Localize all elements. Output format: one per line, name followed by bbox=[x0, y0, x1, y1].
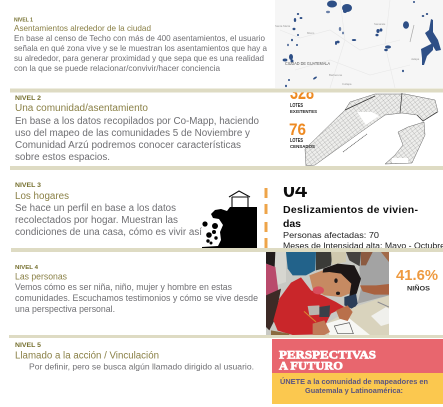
heading: perspectivas a futuro bbox=[279, 348, 376, 372]
map: settlements around the city bbox=[275, 0, 443, 88]
heading: perspectivas a futuro: PERSPECTIVAS bbox=[279, 348, 376, 362]
text block: level 4: una perspectiva personal. bbox=[15, 304, 115, 315]
stat: lots surveyed bbox=[289, 120, 315, 149]
stat: lots surveyed: CENSADOS bbox=[290, 144, 315, 149]
map: settlements around the city: Mixco bbox=[307, 31, 315, 35]
text block: level 3: recolectados por hogar. Muestran las bbox=[15, 215, 178, 226]
text block: level 5: NIVEL 5 bbox=[15, 343, 42, 349]
text block: level 2: En base a los datos recopilados por Co-Mapp, haciendo bbox=[15, 116, 259, 127]
divider: level 3-4 bbox=[11, 248, 443, 252]
text block: level 2 bbox=[15, 96, 259, 163]
card: landslide statistics bbox=[283, 187, 443, 248]
text block: level 2: uso del mapeo de las comunidades 5 de Noviembre y bbox=[15, 128, 250, 139]
dashed orange line bbox=[264, 188, 268, 248]
card: landslide statistics: 04 bbox=[283, 179, 307, 202]
text block: level 4 bbox=[15, 265, 258, 315]
text block: level 4: Las personas bbox=[15, 272, 67, 282]
map: settlements around the city: Jalapa bbox=[411, 57, 420, 61]
panel: perspectivas a futuro bbox=[272, 339, 443, 404]
map: settlements around the city: Barberena bbox=[329, 73, 343, 77]
stat: lots existing bbox=[290, 92, 317, 113]
text block: level 3: Se hace un perfil en base a los datos bbox=[15, 203, 176, 214]
text block: level 4: Vemos cómo es ser niña, niño, mujer y hombre en estas bbox=[15, 282, 232, 293]
stat: 41.6% children: 41.6% bbox=[396, 267, 438, 284]
stat: 41.6% children bbox=[396, 267, 438, 292]
text block: level 1: señala en qué zona vive y se le muestran los asentamientos que hay a bbox=[14, 43, 267, 53]
heading: perspectivas a futuro: A FUTURO bbox=[279, 358, 343, 372]
text block: level 1: su alrededor, para generar proximidad y que sepa que es una realidad bbox=[14, 53, 264, 63]
text block: level 2: sobre estos espacios. bbox=[15, 152, 110, 163]
stat: lots surveyed: LOTES bbox=[290, 138, 304, 144]
text block: level 4: NIVEL 4 bbox=[15, 265, 39, 271]
text block: level 2: Una comunidad/asentamiento bbox=[15, 103, 148, 114]
stat: lots existing: LOTES bbox=[290, 103, 304, 109]
text block: level 5: Llamado a la acción / Vinculación bbox=[15, 350, 159, 362]
stat: 41.6% children: NIÑOS bbox=[407, 286, 430, 292]
call to action text bbox=[280, 377, 428, 395]
call to action text: ÚNETE a la comunidad de mapeadores en bbox=[280, 377, 428, 386]
text block: level 4: comunidades. Escuchamos testimonios y cómo se vive desde bbox=[15, 293, 258, 304]
map: settlements around the city: Cuilapa bbox=[342, 82, 352, 86]
text block: level 5: Por definir, pero se busca algún llamado dirigido al usuario. bbox=[29, 362, 254, 372]
map: community lots bbox=[305, 93, 438, 166]
divider: level 4-5 bbox=[9, 335, 443, 338]
stat: lots existing: 328 bbox=[290, 83, 314, 104]
text block: level 1: En base al censo de Techo con más de 400 asentamientos, el usuario bbox=[14, 33, 265, 43]
divider: level 2-3 bbox=[10, 166, 443, 170]
photo: child drawing bbox=[266, 252, 389, 335]
call to action text: Guatemala y Latinoamérica: bbox=[305, 388, 403, 395]
text block: level 1: Asentamientos alrededor de la ciudad bbox=[14, 23, 151, 33]
text block: level 1: con la que se puede relacionar/convivir/hacer conciencia bbox=[14, 63, 220, 73]
text block: level 1: NIVEL 1 bbox=[14, 18, 33, 24]
map: settlements around the city: Santa María bbox=[275, 24, 291, 28]
card: landslide statistics: Deslizamientos de vivien- bbox=[283, 204, 418, 216]
map: settlements around the city: CIUDAD DE GUATEMALA bbox=[285, 61, 331, 66]
text block: level 5 bbox=[15, 343, 254, 372]
text block: level 2: NIVEL 2 bbox=[15, 96, 42, 102]
text block: level 3: NIVEL 3 bbox=[15, 183, 42, 189]
text block: level 3: condiciones de una casa, cómo es vivir así bbox=[15, 227, 202, 238]
map: settlements around the city: Sanarate bbox=[374, 22, 386, 26]
stat: lots surveyed: 76 bbox=[289, 120, 306, 139]
card: landslide statistics: das bbox=[283, 218, 301, 230]
divider: level 1-2 bbox=[10, 88, 443, 92]
text block: level 3 bbox=[15, 183, 202, 238]
card: landslide statistics: Personas afectadas: 70 bbox=[283, 230, 379, 240]
icon: house on eroding landslide bbox=[202, 191, 257, 248]
card: landslide statistics: Meses de Intensidad alta: Mayo - Octubre bbox=[283, 240, 443, 250]
text block: level 2: Comunidad Arzú podremos conocer características bbox=[15, 140, 241, 151]
text block: level 3: Los hogares bbox=[15, 191, 69, 202]
text block: level 1 bbox=[14, 18, 267, 73]
stat: lots existing: EXISTENTES bbox=[290, 109, 317, 114]
